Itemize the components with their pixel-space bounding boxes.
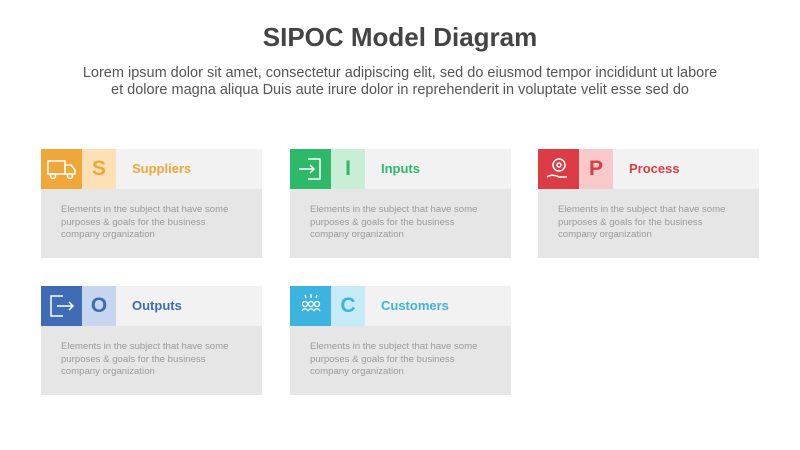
text block: Elements in the subject that have some purposes & goals for the business company organization: [310, 204, 477, 240]
text block: [290, 189, 511, 258]
letter O: O: [91, 294, 107, 317]
panel: outputs: [41, 286, 262, 395]
panel: suppliers: [41, 149, 262, 258]
letter C: C: [340, 294, 356, 317]
letter O: [82, 286, 116, 326]
text block: Elements in the subject that have some purposes & goals for the business company organization: [61, 341, 228, 377]
text block: Elements in the subject that have some purposes & goals for the business company organization: [61, 204, 228, 240]
subtitle: et dolore magna aliqua Duis aute irure dolor in reprehenderit in voluptate velit esse sed do: [111, 82, 689, 98]
letter P: [579, 149, 613, 189]
title: SIPOC Model Diagram: [263, 22, 537, 52]
panel: customers: [290, 286, 511, 395]
text block: Elements in the subject that have some purposes & goals for the business company organization: [310, 341, 477, 377]
panel: inputs: [290, 149, 511, 258]
icon: exit: [41, 286, 82, 326]
icon: people: [290, 286, 331, 326]
letter S: [82, 149, 116, 189]
letter I: I: [345, 157, 351, 180]
text block: [538, 189, 759, 258]
icon: truck: [41, 149, 82, 189]
heading: Suppliers: [132, 161, 191, 176]
text block: [41, 326, 262, 395]
text block: Elements in the subject that have some purposes & goals for the business company organization: [558, 204, 725, 240]
panel: process: [538, 149, 759, 258]
letter C: [331, 286, 365, 326]
heading: Outputs: [132, 298, 182, 313]
text block: [41, 189, 262, 258]
letter P: P: [589, 157, 603, 180]
subtitle: [83, 65, 717, 98]
icon: gear hand: [538, 149, 579, 189]
letter S: S: [92, 157, 106, 180]
heading: Process: [629, 161, 680, 176]
icon: enter: [290, 149, 331, 189]
letter I: [331, 149, 365, 189]
text block: [290, 326, 511, 395]
heading: Inputs: [381, 161, 420, 176]
heading: Customers: [381, 298, 449, 313]
subtitle: Lorem ipsum dolor sit amet, consectetur adipiscing elit, sed do eiusmod tempor incididunt ut labore: [83, 65, 717, 81]
